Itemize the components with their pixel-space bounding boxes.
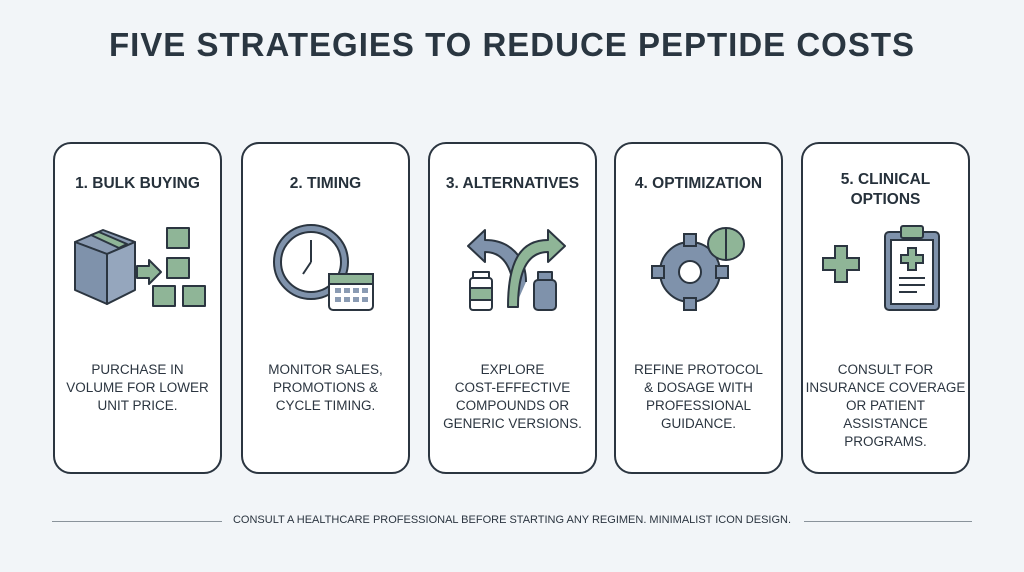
panel: clinical options: OPTIONS xyxy=(851,191,920,208)
panel: optimization: PROFESSIONAL xyxy=(646,398,751,413)
panel: timing: PROMOTIONS & xyxy=(273,380,378,395)
panel: clinical options: OR PATIENT xyxy=(846,398,925,413)
icon: boxes xyxy=(74,227,206,307)
panel: timing: CYCLE TIMING. xyxy=(276,398,375,413)
panel: alternatives: COST-EFFECTIVE xyxy=(455,380,570,395)
icon: split arrows and vials xyxy=(467,229,566,311)
icon: cross and clipboard xyxy=(822,225,940,311)
panel: alternatives xyxy=(428,142,597,474)
panel: clinical options xyxy=(801,142,970,474)
panel: optimization: REFINE PROTOCOL xyxy=(634,362,763,377)
panel: clinical options: INSURANCE COVERAGE xyxy=(806,380,965,395)
title: FIVE STRATEGIES TO REDUCE PEPTIDE COSTS xyxy=(109,26,915,63)
panel: optimization: GUIDANCE. xyxy=(661,416,736,431)
footer note: CONSULT A HEALTHCARE PROFESSIONAL BEFORE STARTING ANY REGIMEN. MINIMALIST ICON DESIGN. xyxy=(233,514,791,526)
panel: timing: MONITOR SALES, xyxy=(268,362,383,377)
panel: bulk buying xyxy=(53,142,222,474)
panel: optimization: & DOSAGE WITH xyxy=(644,380,753,395)
panel: alternatives: GENERIC VERSIONS. xyxy=(443,416,582,431)
panel: timing xyxy=(241,142,410,474)
panel: clinical options: 5. CLINICAL xyxy=(841,171,930,188)
panel: clinical options: PROGRAMS. xyxy=(844,434,927,449)
description xyxy=(66,362,209,413)
description: UNIT PRICE. xyxy=(97,398,178,413)
panel: alternatives: COMPOUNDS OR xyxy=(456,398,569,413)
icon: clock and calendar xyxy=(273,224,374,311)
icon: gear and brain xyxy=(651,227,745,311)
panel: alternatives: 3. ALTERNATIVES xyxy=(446,175,579,192)
panel: optimization: 4. OPTIMIZATION xyxy=(635,175,762,192)
description: VOLUME FOR LOWER xyxy=(66,380,209,395)
panel: alternatives: EXPLORE xyxy=(481,362,544,377)
panel: timing: 2. TIMING xyxy=(290,175,361,192)
description: PURCHASE IN xyxy=(91,362,184,377)
panel: optimization xyxy=(614,142,783,474)
panel: clinical options: CONSULT FOR xyxy=(838,362,933,377)
heading: 1. BULK BUYING xyxy=(75,175,200,192)
panel: clinical options: ASSISTANCE xyxy=(843,416,928,431)
